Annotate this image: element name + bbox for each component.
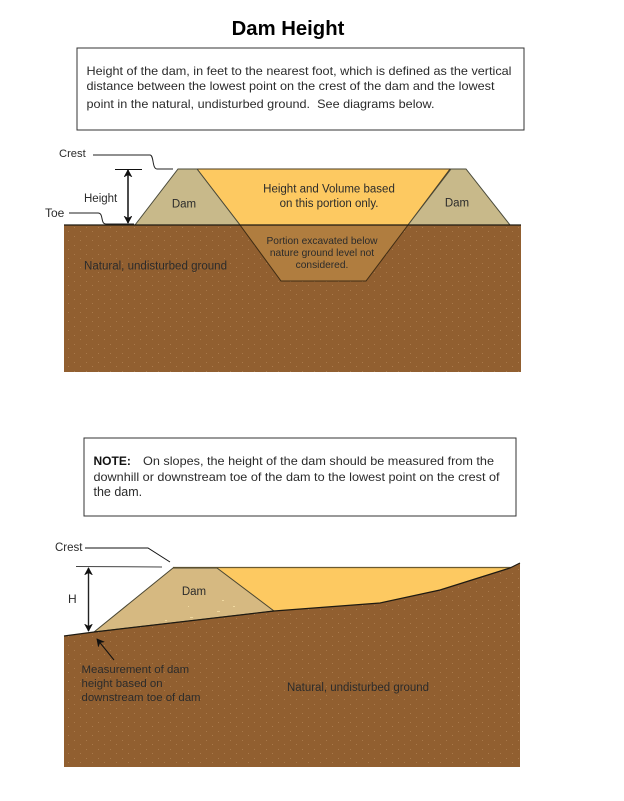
diagram: flat ground dam cross-section: [45, 148, 521, 372]
note text box: [84, 438, 516, 516]
excavated label: [266, 236, 378, 271]
title: Dam Height: [232, 18, 345, 40]
sloped ground: [64, 563, 520, 767]
dam label: Dam: [182, 586, 206, 598]
ground label: Natural, undisturbed ground: [84, 260, 227, 272]
definition text box: [77, 48, 524, 130]
measurement note: Measurement of dam: [82, 664, 189, 676]
crest water line: [173, 566, 512, 568]
height top tick: [115, 168, 142, 170]
ground surface line: [64, 563, 520, 636]
toe leader line: [69, 213, 134, 224]
crest label: Crest: [55, 542, 83, 554]
crest label: Crest: [59, 148, 87, 160]
natural ground: [64, 225, 521, 372]
crest leader line: [85, 548, 170, 562]
measurement note: downstream toe of dam: [82, 692, 201, 704]
crest reference line: [76, 566, 162, 568]
impounded water portion: [197, 169, 450, 225]
H label: H: [68, 592, 77, 606]
right dam label: Dam: [445, 198, 469, 210]
H dimension arrow: [88, 568, 90, 631]
toe pointer arrow: [97, 639, 114, 660]
toe label: Toe: [45, 206, 65, 220]
note text box: On slopes, the height of the dam should be measured from the: [143, 454, 494, 468]
measurement note: [82, 664, 201, 704]
height label: Height: [84, 193, 118, 205]
water portion label line 2: on this portion only.: [280, 198, 378, 210]
note text box: downhill or downstream toe of the dam to the lowest point on the crest of: [94, 470, 500, 484]
excavated label: considered.: [296, 260, 348, 271]
excavated label: Portion excavated below: [266, 236, 378, 247]
definition text box: Height of the dam, in feet to the nearest foot, which is defined as the vertical: [86, 64, 512, 78]
right dam: [408, 169, 510, 225]
left dam: [135, 169, 240, 225]
dam sand speckles: [165, 600, 235, 621]
left dam label: Dam: [172, 198, 196, 210]
height dimension arrow: [127, 170, 129, 223]
measurement note: height based on: [82, 678, 163, 690]
water portion label: Height and Volume based: [263, 184, 395, 196]
excavated label: nature ground level not: [270, 248, 374, 259]
note text box: the dam.: [94, 485, 142, 499]
dam: [94, 568, 274, 632]
impounded water: [217, 568, 510, 611]
definition text box: distance between the lowest point on the crest of the dam and the lowest: [86, 79, 495, 93]
note text box: NOTE:: [94, 454, 131, 468]
diagram: dam on sloped ground: [55, 542, 520, 767]
definition text box: point in the natural, undisturbed ground. See diagrams below.: [86, 97, 434, 111]
crest leader line: [93, 155, 173, 169]
excavated portion: [240, 225, 408, 281]
ground label: Natural, undisturbed ground: [287, 682, 429, 694]
ground line: [64, 224, 521, 226]
